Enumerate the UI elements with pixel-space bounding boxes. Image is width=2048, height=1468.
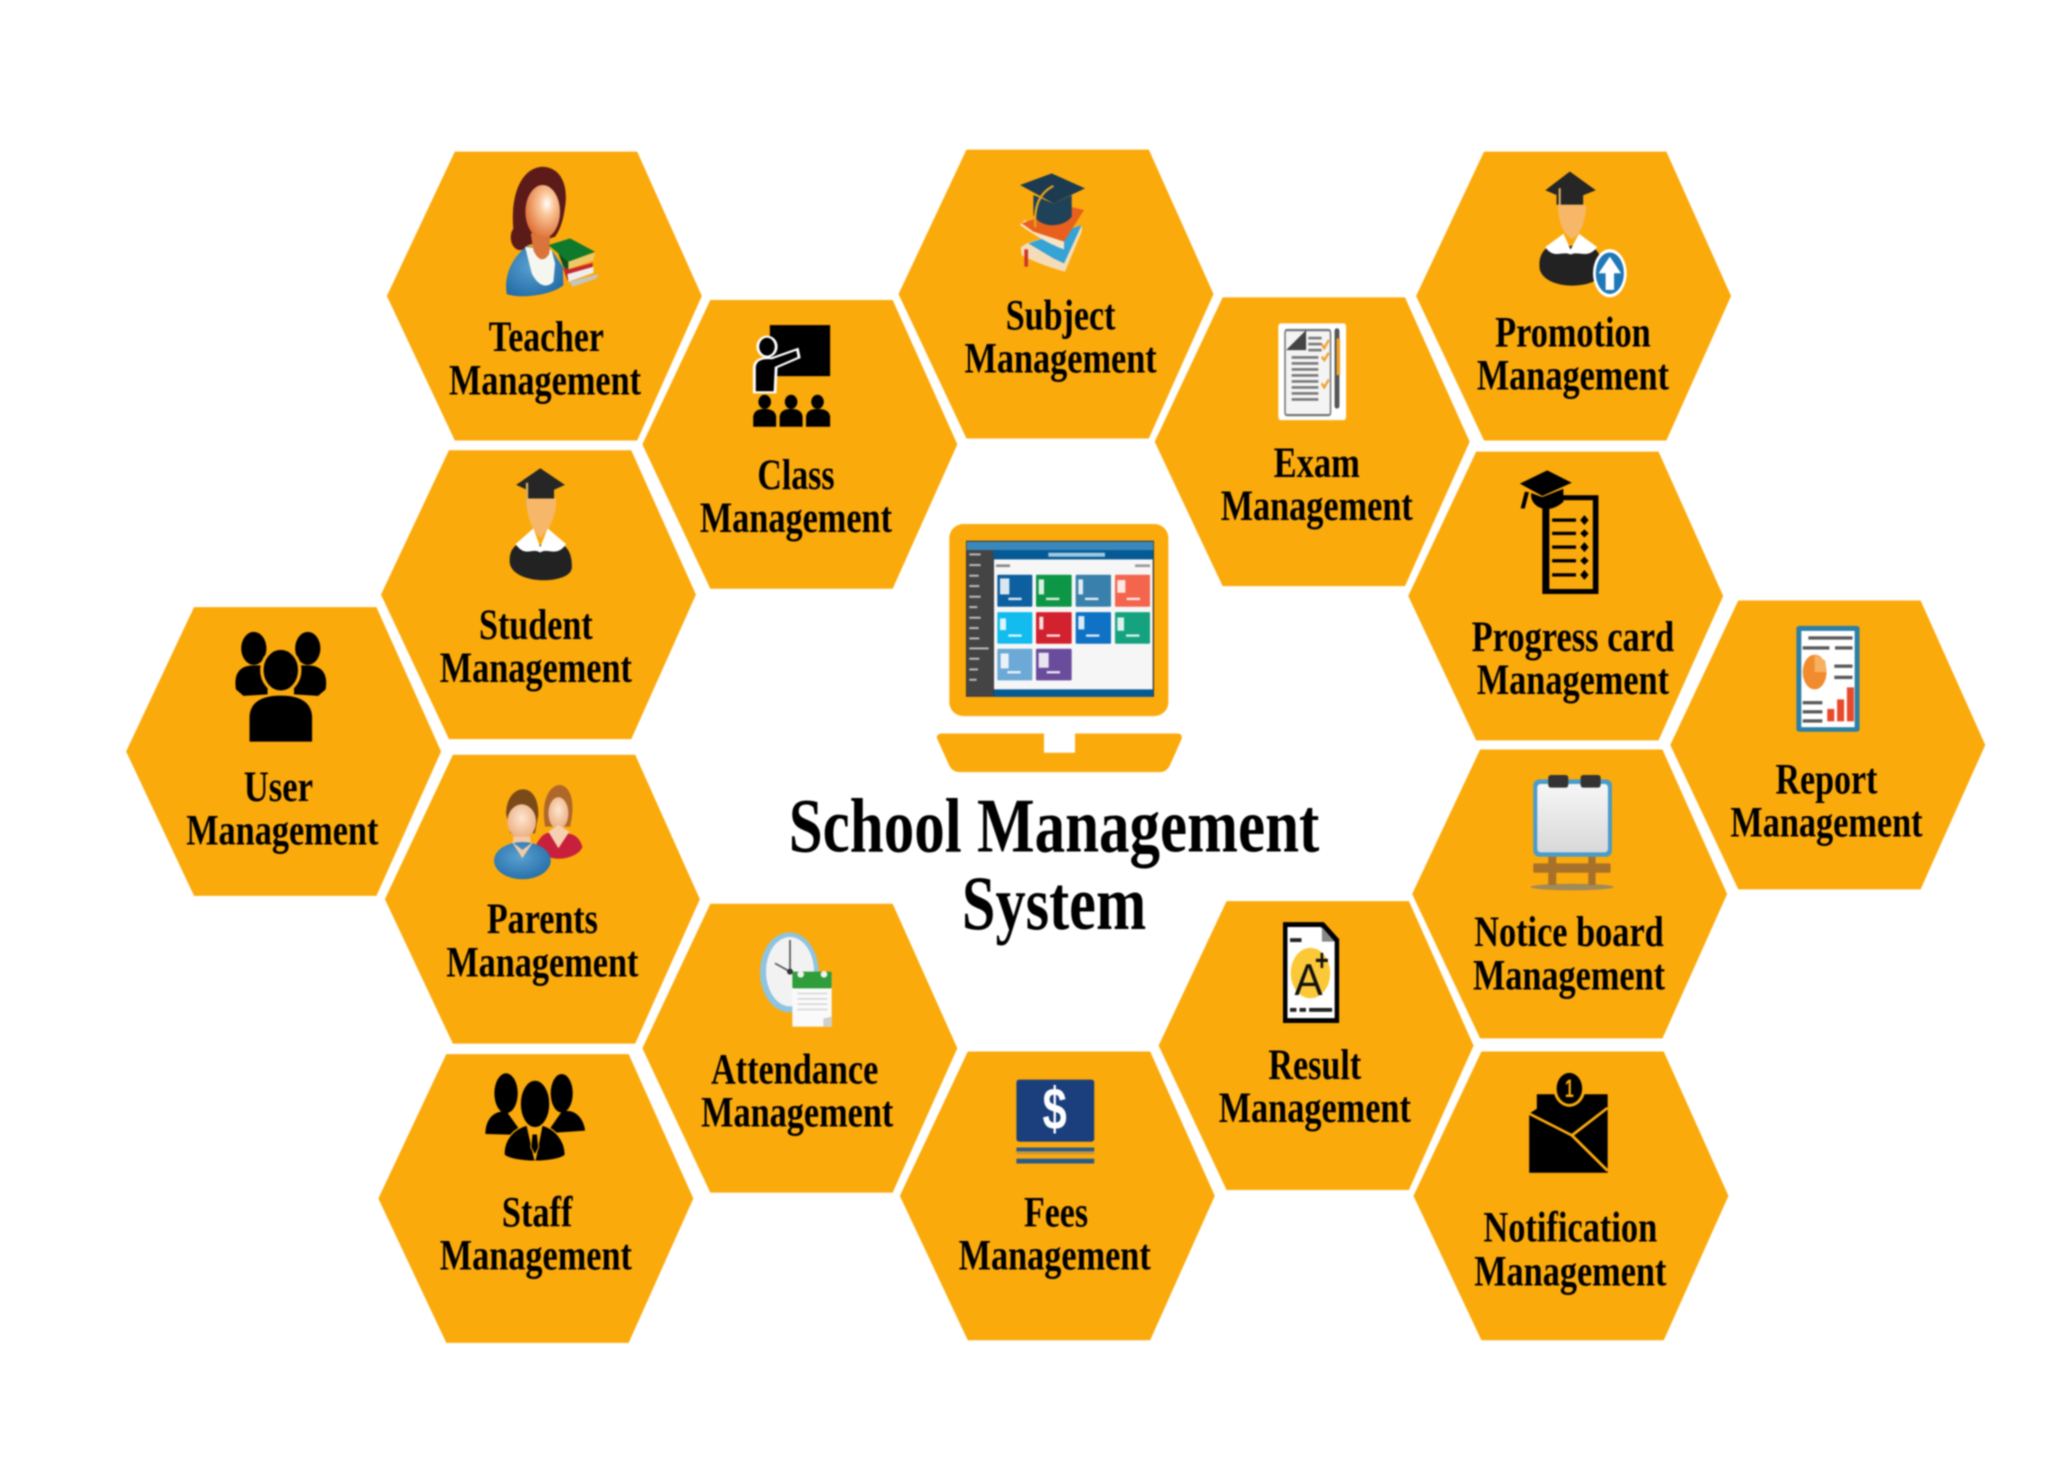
hexagon: Notification Management: Management bbox=[1474, 1248, 1667, 1295]
hexagon: User Management bbox=[126, 607, 441, 896]
title: School Management bbox=[789, 782, 1320, 868]
hexagon: User Management: Management bbox=[186, 807, 379, 854]
label: Class bbox=[757, 452, 834, 499]
hexagon: Attendance Management: Management bbox=[701, 1090, 894, 1137]
label: Student bbox=[479, 602, 593, 649]
icon: notification envelope: 1 bbox=[1565, 1075, 1574, 1103]
icon: graduate with up arrow bbox=[1539, 172, 1627, 297]
hexagon: Teacher Management: Management bbox=[449, 358, 642, 405]
hexagon: Exam Management bbox=[1155, 297, 1470, 586]
label: Notification bbox=[1483, 1205, 1657, 1252]
label: Fees bbox=[1024, 1190, 1088, 1237]
icon: student graduate bbox=[510, 468, 572, 580]
hexagon: Fees Management bbox=[900, 1051, 1215, 1340]
icon: result sheet A+ bbox=[1283, 922, 1339, 1023]
hexagon: Notice board Management bbox=[1412, 750, 1727, 1038]
hexagon: Result Management bbox=[1159, 901, 1474, 1190]
hexagon: Attendance Management bbox=[642, 904, 957, 1193]
hexagon: Staff Management bbox=[378, 1054, 693, 1343]
hexagon: Subject Management bbox=[899, 150, 1214, 438]
icon: exam paper and pen bbox=[1278, 323, 1346, 420]
label: Promotion bbox=[1495, 309, 1651, 356]
hexagon: Exam Management: Management bbox=[1221, 483, 1413, 530]
icon: progress card with cap bbox=[1514, 467, 1598, 594]
icon: dollar bill stack: $ bbox=[1043, 1075, 1067, 1142]
icon: user group bbox=[235, 632, 326, 743]
icon: report sheet bbox=[1796, 626, 1860, 732]
icon: cap on books bbox=[1020, 173, 1085, 272]
hexagon: Result Management: Management bbox=[1219, 1085, 1411, 1132]
title bbox=[789, 782, 1320, 946]
label: User bbox=[244, 764, 313, 811]
label: Parents bbox=[487, 896, 598, 943]
hexagon: Report Management: Management bbox=[1730, 799, 1923, 846]
label: Subject bbox=[1006, 292, 1116, 339]
label: Progress card bbox=[1472, 614, 1674, 661]
hexagon: Promotion Management: Management bbox=[1477, 352, 1669, 399]
hexagon: Student Management bbox=[381, 450, 696, 739]
icon: staff group bbox=[485, 1073, 585, 1161]
label: Staff bbox=[502, 1190, 573, 1237]
icon: teacher with books bbox=[506, 167, 598, 296]
hexagon: Fees Management: Management bbox=[959, 1233, 1151, 1280]
hexagon: Notification Management bbox=[1413, 1051, 1728, 1340]
label: Report bbox=[1775, 756, 1878, 803]
hexagon: Staff Management: Management bbox=[440, 1233, 632, 1280]
icon: result sheet A+: A bbox=[1294, 956, 1323, 1005]
dashboard tiles bbox=[997, 575, 1150, 680]
icon: result sheet A+: + bbox=[1315, 944, 1329, 977]
label: Attendance bbox=[711, 1046, 878, 1093]
icon: parents bbox=[494, 785, 582, 879]
label: Exam bbox=[1274, 440, 1360, 487]
icon: notification envelope bbox=[1529, 1070, 1608, 1173]
center laptop icon with dashboard bbox=[937, 524, 1182, 772]
hexagon: Promotion Management bbox=[1416, 152, 1731, 440]
icon: classroom bbox=[753, 325, 830, 427]
hexagon: Report Management bbox=[1670, 601, 1985, 889]
label: Teacher bbox=[489, 314, 604, 361]
hexagon: Class Management bbox=[642, 300, 957, 589]
hexagon: Parents Management: Management bbox=[446, 939, 639, 986]
hexagon: Subject Management: Management bbox=[965, 335, 1157, 382]
hexagon: Parents Management bbox=[385, 755, 700, 1044]
label: Notice board bbox=[1474, 909, 1664, 956]
hexagon: Class Management: Management bbox=[700, 495, 893, 542]
hexagon: Progress card Management: Management bbox=[1477, 657, 1669, 704]
hexagon: Progress card Management bbox=[1408, 452, 1723, 740]
hexagon: Student Management: Management bbox=[440, 645, 632, 692]
hexagon: Teacher Management bbox=[387, 152, 702, 440]
icon: clock and calendar bbox=[760, 932, 832, 1027]
hexagon: Notice board Management: Management bbox=[1473, 952, 1666, 999]
icon: notice board bbox=[1531, 775, 1614, 890]
title: System bbox=[962, 860, 1146, 946]
icon: dollar bill stack bbox=[1016, 1075, 1094, 1164]
label: Result bbox=[1268, 1042, 1362, 1089]
